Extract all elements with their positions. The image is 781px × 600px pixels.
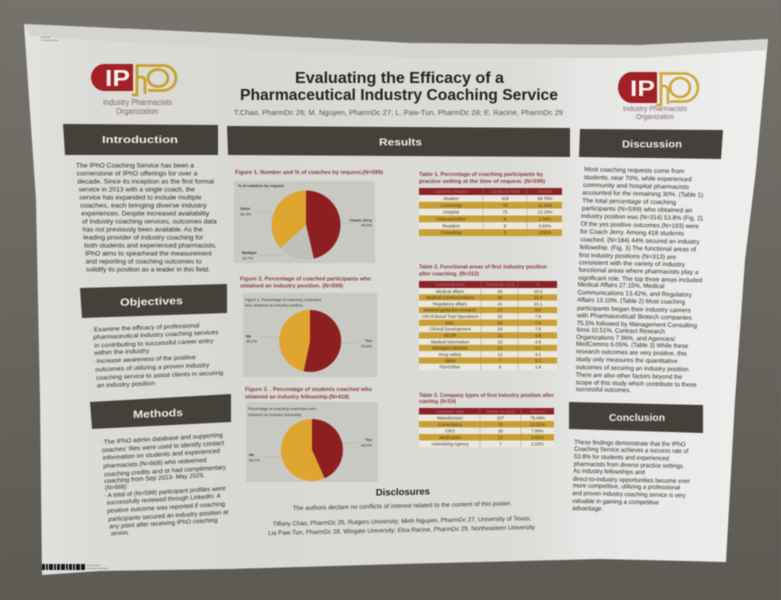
text: methods: successfully reviewed through LinkedIn. A [107, 493, 222, 507]
caption: figure 3: Figure 3. . Percentage of students coached who [245, 387, 373, 393]
text: methods: pharmacists (N=668) who redeemed [103, 457, 207, 470]
text: discussion: 75.5% followed by Management Consulting [577, 320, 698, 329]
table 3: MedComm [439, 435, 461, 440]
text: conclusion: As industry fellowships and [573, 468, 646, 476]
text: methods: coaches' files were used to identify contact [102, 440, 224, 454]
table 2: 19.0 [534, 289, 543, 294]
table 3: 7.96% [531, 428, 544, 433]
table 3: 75.48% [530, 415, 545, 420]
table 2: 15 [498, 339, 503, 344]
text: objectives [90, 321, 224, 390]
text: discussion: The total percentage of coaching [582, 197, 677, 206]
chart: figure 3 pie: Percentage of coaching customers who [248, 406, 316, 411]
chart: figure 2 pie: 46.2% [246, 338, 258, 344]
table 3: Percent [530, 409, 546, 414]
text: discussion: community and hospital pharmacists [583, 182, 689, 191]
table 2: 25 [498, 320, 503, 325]
table 2: FDA/Other [440, 364, 461, 370]
table 2: 7.6 [535, 327, 542, 332]
text: methods: positive outcome was reported if coaching [107, 501, 226, 515]
table 2: 2.2 [535, 358, 542, 363]
table 3 [419, 408, 554, 447]
table 2: HEOR [444, 333, 456, 338]
caption: figure 3: obtained an industry fellowship.(N=418) [245, 394, 349, 400]
table 3: 3.82% [531, 435, 544, 440]
table 1: Community [440, 203, 463, 208]
text: discussion: participants began their industry careers [577, 305, 691, 314]
chart: figure 2 pie: Figure 1. Percentage of coaching customers [245, 297, 321, 302]
text: methods: · The IPhO admin database and supporting [100, 432, 223, 446]
table 2: 4.8 [535, 339, 542, 344]
title: Evaluating the Efficacy of a [295, 70, 504, 87]
caption: table 2: Table 2. Functional areas of first industry position [419, 264, 548, 270]
text: discussion: with Pharmaceutical/ Biotech companies [576, 312, 692, 322]
text: introduction: coaches, each bringing diverse industry [80, 203, 208, 210]
table 2: % [536, 282, 540, 287]
text: discussion: for Coach Jerry. Among 418 students [580, 228, 684, 237]
logo: left IPhO [91, 64, 176, 116]
heading: Objectives [80, 284, 227, 318]
table 2: Managed Markets [432, 346, 468, 351]
table 2: 25 [498, 314, 503, 319]
caption: table 1 [419, 172, 545, 185]
text: introduction: experiences. Despite increased availability [81, 211, 210, 218]
table 2: Clients (N=313) [485, 282, 515, 287]
table 1: Percent [538, 189, 553, 194]
table 2: 13 [498, 346, 503, 351]
logo: right IPhO: IP [630, 76, 655, 101]
table 1: Student [443, 196, 459, 201]
text: objectives: outcomes of utilizing a proven industry [95, 362, 210, 373]
caption: table 3: coaching. (N=314) [419, 399, 456, 405]
table 1: Hospital [443, 210, 459, 215]
text: discussion: outcomes of securing an industry position. [576, 364, 690, 373]
text: discussion: fellowship. (Fig. 3) The functional areas of [580, 244, 696, 253]
table 2: 4.1 [535, 352, 542, 357]
text: discussion [576, 166, 705, 396]
table 2: 7.9 [535, 320, 542, 325]
text: objectives: pharmaceutical industry coaching services [93, 329, 218, 341]
table 3: 10.51% [530, 422, 545, 427]
logo: right IPhO: Industry Pharmacists [623, 104, 687, 113]
text: methods: · A total of (N=599) participant profiles were [104, 485, 226, 499]
text: discussion: Most coaching requests come from [584, 166, 684, 175]
chart: figure 2 pie: Yes [365, 338, 372, 343]
caption: table 1: Table 1. Percentage of coaching participants by [419, 172, 544, 178]
text: discussion: students, near 70%, while experienced [584, 174, 692, 183]
chart: figure 1 pie: Coach Jerry [350, 218, 373, 222]
text: objectives: within the industry [93, 348, 150, 357]
table 2: 13 [498, 352, 503, 357]
table 2: Regulatory affairs [433, 301, 468, 306]
table 2: Medical information [431, 339, 470, 344]
table 3: Advertising Agency [431, 441, 469, 446]
chart: figure 3 pie: 44.0% [361, 442, 373, 448]
table 2: Medical communications [426, 295, 475, 300]
text: objectives: an industry position [97, 380, 156, 389]
table 1: 8 [504, 216, 507, 222]
table 1 [419, 188, 562, 236]
text: conclusion: more competitive, utilizing a professional [573, 482, 680, 491]
text: discussion: participants (N=599) who obtained an [582, 205, 693, 214]
text: discussion: functional areas where pharmacists play a [579, 267, 699, 276]
text: discussion: Communications 13.42%, and Regulatory [578, 289, 693, 299]
table 3: 7 [499, 441, 502, 446]
text: introduction: service in 2013 with a single coach, the [79, 187, 196, 194]
text: introduction: leading provider of industry coaching for [83, 235, 203, 242]
text: methods: coaching from Sep 2013- May 2025. [104, 472, 205, 485]
table 2: 4.8 [535, 333, 542, 338]
table 2: Medical affairs [436, 289, 465, 294]
text: methods: participants secured an industry position at [108, 509, 229, 523]
chart: figure 1 pie: 36.4% [240, 212, 252, 216]
caption: figure 2: obtained an industry position. (N=599) [240, 284, 343, 290]
caption: table 2 [419, 264, 548, 278]
text: discussion: successful outcomes. [576, 386, 631, 394]
text: discussion: industry position was (N=314) 53.8% (Fig. 2). [581, 213, 705, 222]
text: objectives: in contributing to successful career entry [94, 338, 214, 350]
table 2: MSL [445, 320, 455, 325]
text: methods: information on students and experienced [103, 448, 221, 462]
table 2: 7.9 [535, 314, 542, 319]
heading: Introduction [63, 124, 218, 155]
text: conclusion: Coaching Service achieves a success rate of [574, 446, 689, 455]
text: conclusion: and proven industry coaching service is very [572, 490, 686, 499]
text: discussion: significant role. The top three areas included [578, 275, 703, 284]
table 1: 5 [504, 223, 507, 228]
text: methods [100, 432, 229, 538]
barcode label: Professional Large Format [87, 567, 109, 570]
table 3: Consultancy [438, 422, 463, 427]
text: introduction: The IPhO Coaching Service has been a [76, 163, 195, 170]
table 3: 12 [498, 435, 503, 440]
chart: figure 2 pie: 53.8% [361, 344, 373, 348]
disclosures [268, 484, 536, 537]
caption: figure 2: Figure 2. Percentage of coached participants who [240, 276, 372, 282]
logo: left IPhO: Industry Pharmacists [103, 98, 172, 107]
logo: left IPhO: Organization [116, 107, 158, 116]
table 2: 6 [499, 364, 502, 370]
table 2: Clinical Development [429, 327, 471, 332]
print slug top left: Poster Title [41, 36, 50, 39]
caption: table 3: Table 3. Company types of first industry position after [419, 393, 555, 399]
text: discussion: research outcomes are very positive, this [576, 348, 687, 358]
table 1: 418 [501, 196, 509, 201]
table 1: 12.19% [538, 210, 553, 215]
authors: T.Chao, PharmDc 26; M. Nguyen, PharmDc 27; L. Paw-Tun, PharmDc 28; E. Racine, PharmDc 29 [234, 110, 563, 117]
text: discussion: firms 10.51%, Contract Research [577, 327, 666, 336]
text: introduction: of Industry coaching services, outcomes data [82, 219, 217, 226]
text: discussion: Of the yes positive outcomes (N=193) were [581, 221, 700, 230]
chart: figure 1 pie: % of coaches by request [238, 183, 284, 188]
table 2: 8.6 [535, 308, 542, 313]
text: introduction: solidify its position as a leader in this field. [86, 267, 210, 274]
print slug top left [41, 36, 59, 42]
table 2: Marketing/Market research [424, 308, 477, 313]
chart: figure 3 pie [246, 402, 378, 482]
text: introduction: decade. Since its inception as the first formal [77, 179, 214, 186]
chart: figure 1 pie [234, 181, 375, 263]
heading: Results [227, 126, 570, 157]
table 1: 3 [504, 230, 507, 235]
text: conclusion: 53.8% for students and experienced [574, 453, 670, 462]
text: discussion: study only measures the quantitative [576, 356, 678, 365]
table 2 [419, 281, 557, 370]
table 2: 15 [498, 333, 503, 338]
logo: left IPhO: IP [105, 65, 130, 91]
heading: Methods: Methods [133, 407, 183, 421]
table 1: 0.83% [539, 223, 551, 228]
heading: Discussion: Discussion [622, 138, 682, 150]
text: discussion: There are also other factors beyond the [576, 372, 683, 381]
table 3: 237 [497, 415, 505, 420]
heading: Objectives: Objectives [120, 295, 183, 309]
chart: figure 1 pie: Multiple [242, 250, 258, 255]
table 2: Functional Area [435, 282, 465, 287]
text: methods: (N=668) [105, 483, 127, 492]
chart: figure 2 pie [243, 293, 377, 377]
chart: figure 2 pie: No [246, 334, 252, 338]
table 2: 27 [498, 308, 503, 313]
text: conclusion: advantage. [572, 505, 604, 513]
text: conclusion: direct-to-industry opportunities become ever [573, 476, 690, 485]
text: introduction: both students and experienced pharmacists, [84, 243, 217, 250]
chart: figure 1 pie: Other [240, 206, 251, 211]
table 1: 1.34% [539, 216, 551, 222]
text: discussion: Affairs 13.10%. (Table 2) Most coaching [577, 297, 686, 306]
table 1: Resident [442, 223, 460, 228]
chart: figure 3 pie: 56.0% [249, 458, 261, 462]
caption: figure 3 [245, 387, 373, 400]
heading: Introduction: Introduction [102, 134, 178, 146]
text: conclusion: valuable in gaining a competitive [572, 498, 660, 506]
table 2: 13.4 [534, 295, 543, 300]
disclosures: Disclosures [376, 486, 430, 499]
table 1: 0.50% [539, 230, 551, 235]
text: conclusion [572, 439, 690, 514]
text: objectives: coaching service to assist clients in securing [96, 370, 224, 382]
table 2: CRA/Clinical Trial Operations [422, 314, 479, 319]
barcode label: Poster printed by [87, 564, 101, 567]
heading: Conclusion: Conclusion [609, 412, 665, 424]
table 2: 24 [498, 327, 503, 332]
table 1: 11.16% [538, 203, 552, 208]
text: discussion: Medical Affairs 27.15%, Medical [578, 281, 664, 290]
text: discussion: first industry positions (N=313) are [579, 252, 677, 261]
text: discussion: coached, (N=184) 44% secured an industry [580, 236, 700, 246]
text: introduction: service has expanded to include multiple [79, 195, 202, 202]
heading: Methods [90, 394, 231, 429]
table 1: Clients (N=599) [490, 189, 520, 194]
caption: table 3 [419, 393, 555, 405]
caption: table 2: after coaching. (N=313) [419, 272, 479, 278]
poster top fold band [24, 24, 768, 58]
chart: figure 3 pie: Yes [365, 437, 372, 442]
text: conclusion: These findings demonstrate that the IPhO [574, 439, 686, 448]
text: discussion: consistent with the variety of industry [579, 259, 686, 269]
table 1: Academic Practice [434, 189, 469, 194]
table 2: Sales [445, 358, 456, 363]
logo: right IPhO [618, 72, 698, 121]
chart: figure 3 pie: No [249, 452, 255, 457]
text: introduction: IPhO aims to spearhead the measurement [85, 251, 212, 258]
logo: right IPhO: Organization [636, 112, 674, 121]
table 2: 41 [498, 301, 503, 306]
heading: Results: Results [379, 136, 422, 148]
text: discussion: accounted for the remaining 30%. (Table 1) [582, 189, 703, 199]
text: discussion: MedComms 6.05%. (Table 3) While these [576, 341, 689, 350]
text: discussion: Organizations 7.96%, and Agencies/ [576, 334, 675, 343]
heading: Conclusion [569, 402, 703, 433]
table 2: 13.1 [534, 301, 543, 306]
table 2: 60 [498, 289, 503, 294]
text: discussion: scope of this study which contribute to these [576, 379, 697, 389]
text: methods: coaching credits and or had complimentary [104, 464, 227, 478]
table 2: 4.1 [535, 346, 542, 351]
table 3: Manufacturer [437, 415, 463, 420]
table 3: Clients (N=314) [486, 409, 516, 414]
disclosures: Lia Paw-Tun, PharmDc 28, Wingate University; Elsa Racine, PharmDc 29, Northeastern University [268, 524, 536, 537]
text: methods: services. [111, 529, 129, 537]
title [240, 70, 558, 104]
caption: figure 1: Figure 1. Number and % of coaches by request.(N=599) [235, 170, 383, 176]
table 1: Unknown/other [436, 216, 466, 222]
chart: figure 1 pie: 46.9% [361, 222, 373, 228]
table 2: 42 [498, 295, 503, 300]
table 1: Consulting [441, 230, 462, 235]
text: introduction: cornerstone of IPhO offerings for over a [77, 171, 198, 178]
text: introduction: and reporting of coaching outcomes to [86, 259, 202, 266]
caption: table 1: practice setting at the time of request. (N=599) [419, 179, 545, 185]
print slug top left: Printed by PosterPrint [41, 39, 59, 42]
table 3: CRO [445, 428, 455, 433]
disclosures: Tiffany Chao, PharmDc 26, Rutgers University; Minh Nguyen, PharmDc 27, University of Texas; [273, 515, 531, 528]
text: objectives: · Increase awareness of the positive [93, 354, 196, 365]
heading: Discussion [579, 129, 723, 159]
text: introduction [76, 163, 217, 274]
table 2: Drug safety [439, 352, 462, 357]
text: methods: any point after receiving IPhO coaching [109, 517, 218, 530]
table 2: 1.9 [535, 364, 542, 370]
chart: figure 1 pie: 16.7% [242, 256, 254, 260]
text: objectives: · Examine the efficacy of professional [90, 322, 199, 334]
table 3: 25 [498, 428, 503, 433]
table 1: 69.78% [538, 196, 553, 201]
table 3: Company Type [436, 409, 465, 414]
chart: figure 2 pie: who obtained an industry position. [245, 302, 304, 308]
text: conclusion: pharmacists from diverse practice settings. [574, 461, 685, 470]
table 3: 33 [498, 422, 503, 427]
text: introduction: has not previously been available. As the [83, 227, 203, 234]
table 2: 7 [499, 358, 502, 363]
table 1: 75 [503, 210, 508, 215]
disclosures: The authors declare no conflicts of interest related to the content of this poster. [293, 500, 512, 512]
barcode label [42, 564, 109, 570]
caption: figure 2 [240, 276, 372, 290]
table 3: 2.23% [531, 441, 544, 446]
title: Pharmaceutical Industry Coaching Service [240, 87, 558, 104]
table 1: 70 [503, 203, 508, 208]
chart: figure 3 pie: obtained an industry fellowship. [248, 412, 302, 417]
